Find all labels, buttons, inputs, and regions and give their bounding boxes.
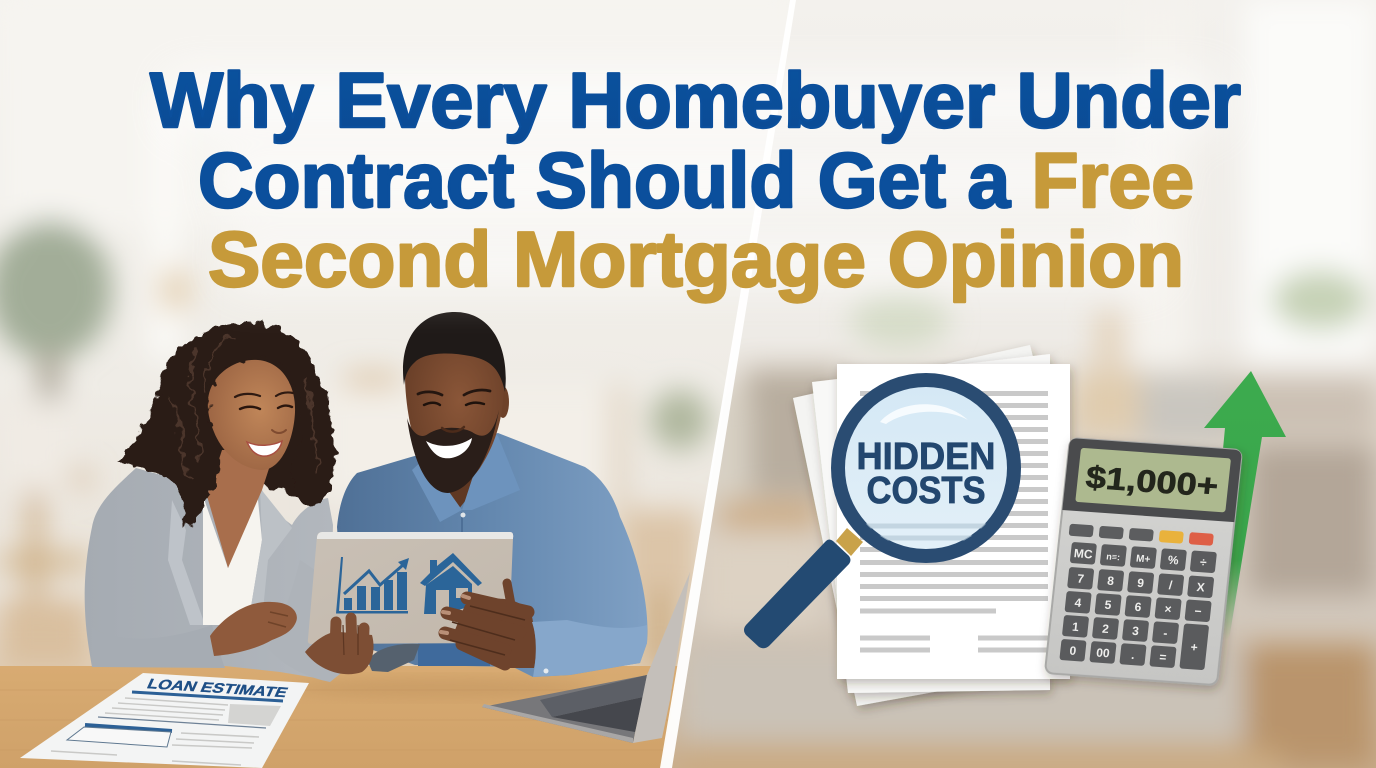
keypad: 7: [1077, 572, 1085, 586]
woman: left hand holding tablet: [305, 618, 374, 674]
handle: [744, 540, 850, 648]
title line 2: Contract Should Get a Free: [198, 136, 1194, 224]
text lines: [860, 394, 1048, 650]
calculator: $1,000+: [1084, 460, 1220, 504]
keypad: =: [1159, 650, 1167, 664]
man: right hand: [441, 583, 536, 668]
woman: face: [208, 360, 295, 470]
man: shirt collar: [412, 430, 520, 522]
keypad: 8: [1107, 574, 1115, 588]
keypad: ×: [1164, 602, 1172, 616]
man: right sleeve cuff: [532, 620, 647, 677]
woman: curly hair front: [120, 325, 334, 528]
man: hair: [403, 312, 506, 392]
background: right room: [650, 0, 1376, 768]
keypad: 3: [1131, 624, 1140, 638]
keypad: [1059, 542, 1217, 670]
man: beard: [407, 410, 499, 493]
man: neck: [425, 432, 488, 510]
woman: lapel: [168, 500, 205, 625]
icon: growth chart: [336, 557, 409, 614]
man: shirt below tablet: [418, 640, 490, 666]
keypad: 9: [1137, 576, 1145, 590]
back pages: [793, 345, 1035, 706]
keypad: %: [1167, 553, 1180, 568]
document heading: LOAN ESTIMATE: [144, 677, 290, 701]
keypad: n≡:: [1106, 551, 1121, 562]
slanted white divider: [660, 0, 796, 768]
function keys: [1069, 524, 1214, 546]
keypad: 0: [1069, 644, 1077, 658]
man: blue shirt: [337, 433, 648, 677]
title line 1: Why Every Homebuyer Under: [150, 56, 1241, 144]
laptop screen back: [633, 572, 690, 743]
keypad: MC: [1073, 546, 1094, 561]
woman: right lapel: [248, 488, 292, 625]
keypad: ÷: [1199, 555, 1208, 570]
tablet with chart and house icons: [308, 532, 513, 644]
keypad: 1: [1071, 620, 1080, 634]
title: [150, 56, 1241, 303]
keypad: .: [1131, 648, 1135, 662]
keypad: X: [1196, 580, 1205, 595]
woman: hand: [210, 602, 297, 656]
brass collar: [836, 528, 863, 556]
laptop: [482, 572, 690, 743]
calculator display: [1075, 448, 1231, 512]
keypad: -: [1163, 626, 1168, 640]
lens: [838, 380, 1014, 556]
couple: hands on tablet: [305, 583, 647, 677]
keypad: 4: [1074, 596, 1082, 610]
magnifying glass: [744, 380, 1014, 648]
man: ear: [497, 386, 509, 418]
woman: hair back: [120, 322, 333, 501]
keypad: −: [1194, 604, 1202, 619]
lens label: HIDDEN: [856, 436, 996, 478]
keypad: /: [1168, 578, 1174, 592]
keypad: 2: [1101, 622, 1110, 636]
front page: [837, 364, 1070, 679]
woman: neck and chest: [207, 450, 275, 568]
man: head: [405, 330, 504, 486]
keypad: +: [1190, 640, 1198, 655]
woman: white blouse: [203, 490, 262, 625]
keypad: 6: [1134, 600, 1142, 614]
calculator: [1045, 438, 1242, 685]
couple: man: [337, 312, 648, 677]
man: left cuff: [368, 644, 420, 672]
title glow: [170, 75, 1220, 285]
laptop base: [482, 675, 647, 743]
man: eyes and brows: [418, 390, 490, 395]
magnifying glass: COSTS: [866, 470, 986, 512]
keypad: 00: [1096, 645, 1111, 660]
woman: blazer: [85, 468, 333, 680]
background: left room: [0, 0, 800, 768]
loan estimate document: [20, 673, 309, 768]
table: [0, 666, 720, 768]
keypad: 5: [1104, 598, 1112, 612]
woman: left arm sleeve: [268, 560, 345, 682]
icon: rising green arrow: [1204, 371, 1286, 640]
woman: eyes and brows: [235, 392, 293, 397]
woman: forearm sleeve: [92, 625, 225, 668]
man: smile: [426, 438, 472, 458]
icon: house: [420, 553, 482, 614]
right side: document stack: [793, 345, 1070, 706]
title line 3: Second Mortgage Opinion: [208, 215, 1184, 303]
couple: woman: [85, 322, 345, 682]
keypad: M+: [1135, 554, 1151, 566]
woman: hair highlights: [170, 335, 318, 480]
woman: smile: [247, 441, 282, 456]
